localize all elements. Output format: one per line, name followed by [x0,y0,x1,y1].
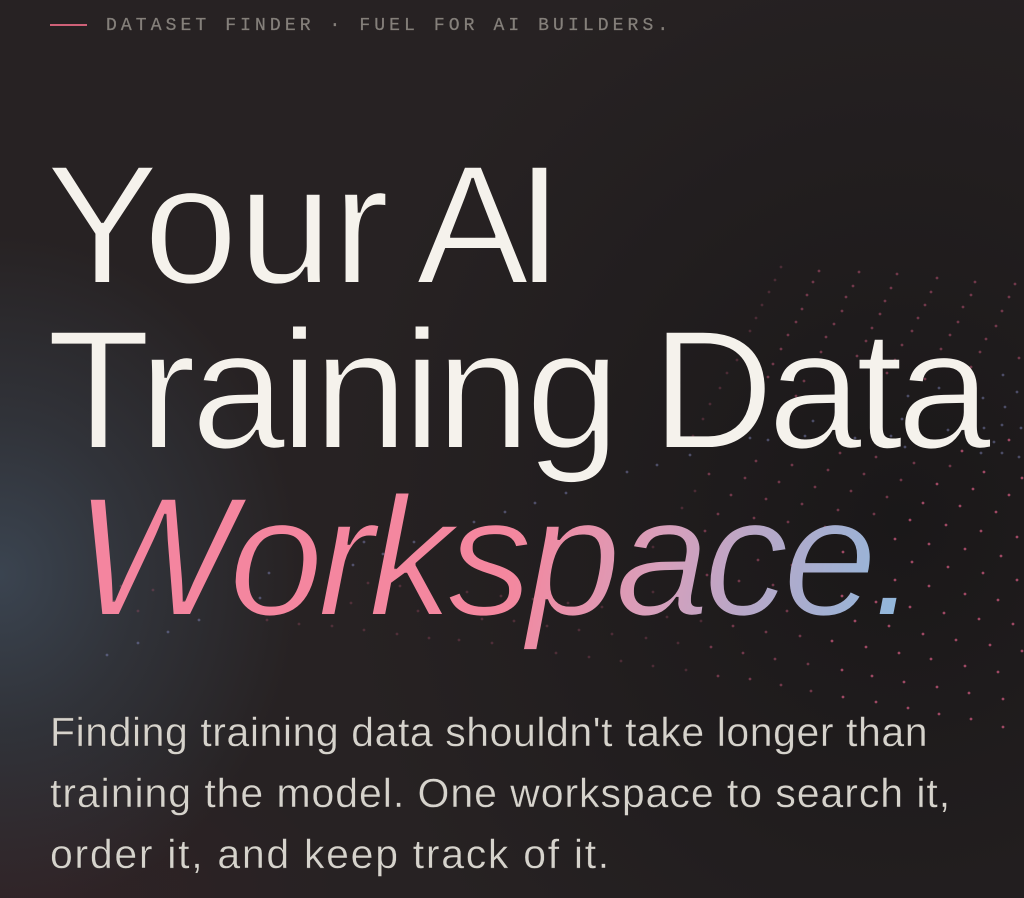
dots: medium pink, centre right [705,271,1019,691]
subtitle paragraph: Finding training data shouldn't take longer than [50,709,928,755]
headline line 1: Your AI [46,130,557,319]
eyebrow rule [50,24,87,26]
dots: faint pink, left and centre [107,267,781,670]
subtitle paragraph [50,709,951,877]
dots: bright pink, lower right [832,440,1022,727]
subtitle paragraph: order it, and keep track of it. [50,831,611,877]
eyebrow label: DATASET FINDER · FUEL FOR AI BUILDERS. [106,16,672,36]
subtitle paragraph: training the model. One workspace to search it, [50,770,951,816]
dots: muted blue band [107,375,1021,655]
headline line 2: Training Data [47,295,985,484]
headline line 3: gradient italic: Workspace. [75,462,913,651]
